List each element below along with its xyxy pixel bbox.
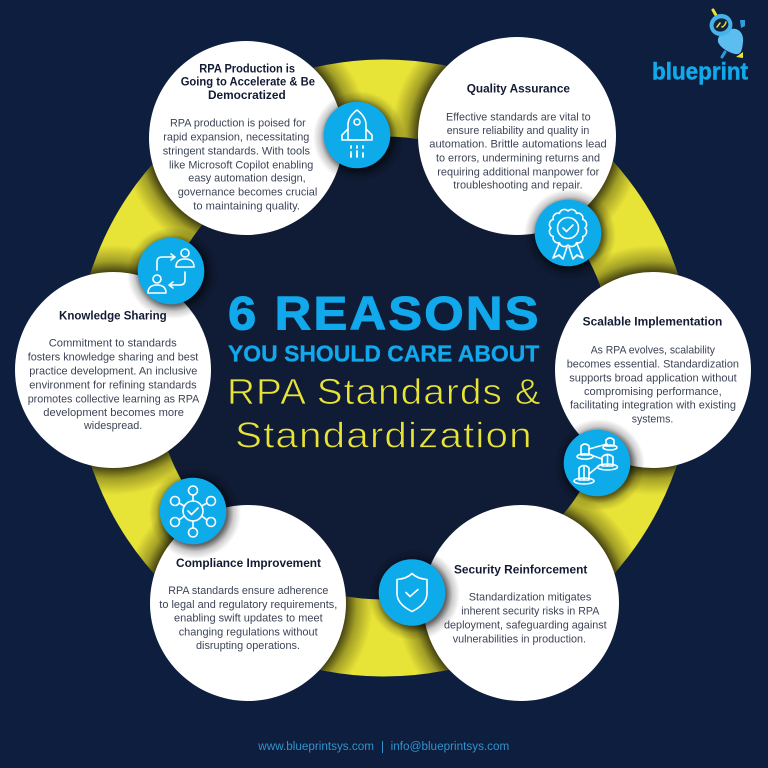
heading: Knowledge Sharing: Knowledge Sharing: [59, 309, 167, 323]
heading: Security Reinforcement: Security Reinforcement: [454, 562, 587, 576]
footer contact: www.blueprintsys.com: [257, 741, 374, 753]
text: Quality Assurance body: Effective standards are vital to: [446, 112, 591, 124]
panel: RPA Production: [149, 41, 343, 235]
text: Scalable Implementation body: becomes essential. Standardization: [567, 358, 739, 370]
heading: RPA Production: RPA Production is: [199, 61, 295, 75]
text: Compliance Improvement body: RPA standards ensure adherence: [168, 585, 328, 597]
text: RPA Production body: stringent standards. With tools: [163, 145, 310, 157]
heading: Scalable Implementation: Scalable Implementation: [583, 315, 722, 329]
text: Scalable Implementation body: systems.: [632, 414, 673, 426]
text: Compliance Improvement body: to legal and regulatory requirements,: [159, 599, 337, 611]
text: RPA Production body: easy automation design,: [188, 173, 306, 185]
text: Knowledge Sharing body: environment for refining standards: [29, 379, 197, 391]
text: Security Reinforcement body: vulnerabilities in production.: [453, 633, 586, 645]
icon: shield: [368, 548, 460, 640]
panel: Security Reinforcement: [423, 505, 619, 701]
text: Knowledge Sharing body: Commitment to standards: [49, 338, 177, 350]
text: Quality Assurance body: automation. Brittle automations lead: [429, 139, 607, 151]
text: RPA Production body: [163, 118, 317, 212]
yellow ring: [90, 60, 678, 676]
text: Knowledge Sharing body: promotes collective learning as RPA: [28, 393, 200, 405]
text: Security Reinforcement body: inherent security risks in RPA: [461, 606, 600, 618]
icon: quality ribbon: [524, 189, 616, 281]
wordmark: blueprint: [652, 58, 748, 85]
text: Compliance Improvement body: changing regulations without: [179, 626, 319, 638]
text: Knowledge Sharing body: [28, 338, 200, 432]
text: Scalable Implementation body: supports broad application without: [569, 372, 738, 384]
footer contact: [257, 741, 509, 753]
title line: you should care about: YOU SHOULD CARE ABOUT: [228, 341, 540, 367]
icon: robot mascot: [706, 10, 745, 58]
text: Scalable Implementation body: compromising performance,: [584, 386, 722, 398]
text: Security Reinforcement body: [444, 592, 608, 645]
heading: RPA Production: Democratized: [208, 88, 286, 102]
heading: RPA Production: [181, 61, 315, 102]
text: Quality Assurance body: troubleshooting and repair.: [453, 179, 583, 191]
text: Quality Assurance body: requiring additional manpower for: [437, 166, 600, 178]
text: Security Reinforcement body: Standardization mitigates: [469, 592, 592, 604]
text: Quality Assurance body: ensure reliability and quality in: [447, 125, 589, 137]
text: Knowledge Sharing body: development becomes more: [43, 407, 184, 419]
heading: RPA Production: Going to Accelerate & Be: [181, 75, 315, 89]
title line: 6 Reasons: 6 REASONS: [228, 286, 541, 339]
text: Scalable Implementation body: [567, 344, 739, 426]
title: [227, 286, 542, 456]
text: Knowledge Sharing body: fosters knowledge sharing and best: [28, 352, 199, 364]
text: Security Reinforcement body: deployment, safeguarding against: [444, 619, 608, 631]
panel: Knowledge Sharing: [15, 272, 211, 468]
icon: rocket: [313, 91, 405, 183]
icon: compliance hub: [149, 467, 241, 559]
text: RPA Production body: governance becomes crucial: [178, 187, 317, 199]
logo: blueprint: [652, 10, 748, 85]
text: Scalable Implementation body: facilitating integration with existing: [570, 399, 736, 411]
text: RPA Production body: rapid expansion, necessitating: [163, 132, 309, 144]
title line: RPA Standards &: RPA Standards &: [227, 371, 542, 412]
icon: knowledge sharing: [127, 227, 219, 319]
panel: Compliance Improvement: [150, 505, 346, 701]
icon: network nodes: [553, 419, 645, 511]
text: RPA Production body: RPA production is poised for: [170, 118, 306, 130]
text: Quality Assurance body: [429, 112, 607, 191]
footer contact: info@blueprintsys.com: [391, 741, 509, 753]
title line: Standardization: Standardization: [235, 415, 533, 456]
text: Compliance Improvement body: [159, 585, 337, 652]
heading: Compliance Improvement: Compliance Improvement: [176, 556, 321, 570]
text: Compliance Improvement body: disrupting operations.: [196, 640, 300, 652]
text: Compliance Improvement body: enabling swift updates to meet: [174, 613, 324, 625]
text: Scalable Implementation body: As RPA evolves, scalability: [591, 344, 715, 356]
panel: Quality Assurance: [418, 37, 616, 235]
text: RPA Production body: like Microsoft Copilot enabling: [169, 159, 313, 171]
text: Knowledge Sharing body: practice development. An inclusive: [29, 366, 197, 378]
text: Quality Assurance body: to errors, undermining returns and: [436, 153, 600, 165]
heading: Quality Assurance: Quality Assurance: [467, 82, 570, 96]
panel: Scalable Implementation: [555, 272, 751, 468]
text: RPA Production body: to maintaining quality.: [193, 200, 300, 212]
text: Knowledge Sharing body: widespread.: [83, 420, 142, 432]
